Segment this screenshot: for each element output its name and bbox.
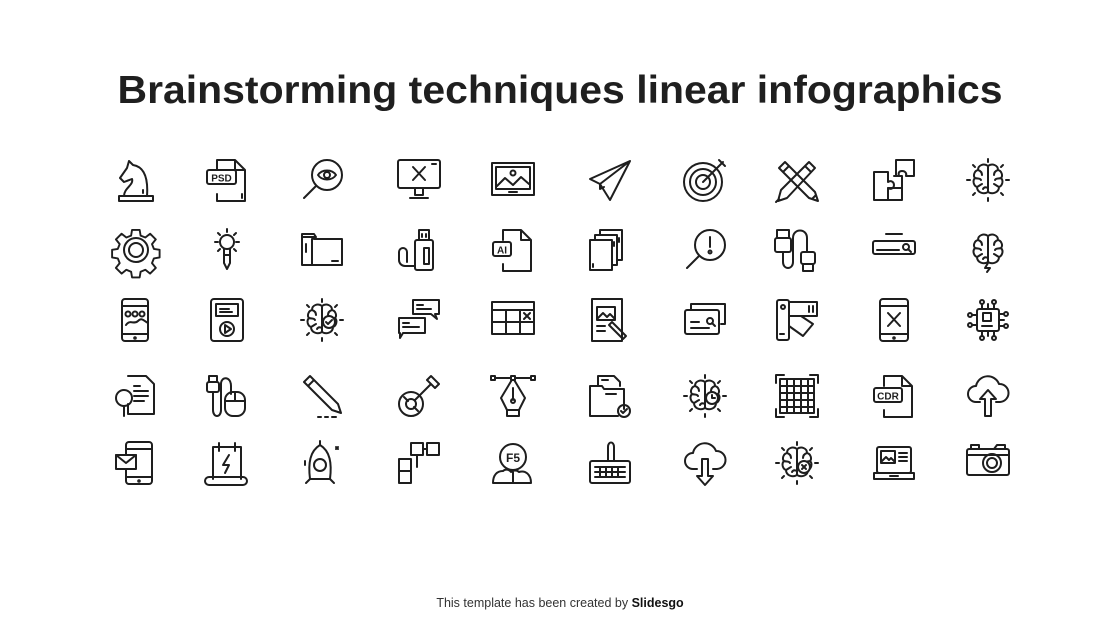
icon: head F5 (493, 444, 531, 483)
icon: gear (112, 230, 160, 277)
icon: brain check (301, 299, 343, 341)
icon: PSD file (207, 160, 245, 201)
icon: phone mail (116, 442, 152, 484)
icon: chess knight (119, 161, 153, 201)
icon: keyboard (590, 442, 630, 483)
icon: usb cable (775, 230, 815, 271)
icon: pen tool (491, 376, 535, 416)
icon: pencil (304, 376, 341, 417)
icon: folder (302, 234, 342, 265)
icon: cloud download (685, 443, 726, 485)
icon: table x (492, 302, 534, 334)
icon: search bar (873, 234, 915, 254)
icon: blocks diagram (399, 443, 439, 483)
icon: head F5: F5 (506, 451, 520, 465)
icon: magnifier alert (687, 230, 725, 268)
icon: rocket (305, 441, 338, 483)
icon: document image pen (592, 299, 626, 341)
icon: brain clock (684, 375, 726, 417)
icon: crossed pencils (776, 162, 818, 202)
icon: magnifier document (116, 376, 154, 416)
icon: chat bubbles (399, 300, 439, 338)
icon: puzzle (874, 160, 914, 200)
icon: magnifier eye (304, 160, 342, 198)
icon: brain bolt (974, 235, 1002, 272)
icon grid (112, 159, 1009, 485)
icon: picture frame (492, 163, 534, 195)
icon: AI file (493, 230, 531, 271)
icon: media player (211, 299, 243, 341)
icon: brain x (776, 442, 818, 484)
icon: paper plane (590, 161, 630, 200)
footer credit: This template has been created by Slidesgo (436, 596, 684, 610)
icon: folder check (590, 376, 630, 417)
icon: chip circuit (968, 300, 1008, 340)
icon: laptop image (874, 447, 914, 479)
icon: brain rays (967, 159, 1009, 201)
icon: lifebuoy key (399, 376, 439, 416)
icon: camera (967, 445, 1009, 475)
icon: calendar bolt (205, 443, 247, 485)
icon: usb drive (399, 230, 433, 270)
icon: AI file: AI (497, 246, 507, 256)
icon: CDR file (874, 376, 912, 417)
icon: cloud upload (968, 376, 1009, 416)
icon: cards search (685, 304, 725, 334)
icon: lightbulb pen (215, 229, 239, 269)
icon: phone design (880, 299, 908, 341)
title: Brainstorming techniques linear infographics (118, 69, 1002, 112)
icon: phone gallery (122, 299, 148, 341)
icon: target (684, 160, 725, 201)
icon: grid crop (776, 375, 818, 417)
icon: CDR file: CDR (877, 392, 900, 402)
icon: stacked papers (590, 230, 622, 270)
icon: PSD file: PSD (211, 174, 232, 184)
icon: monitor design (398, 160, 440, 198)
icon: usb mouse (207, 376, 245, 416)
icon: color swatches (777, 300, 817, 340)
